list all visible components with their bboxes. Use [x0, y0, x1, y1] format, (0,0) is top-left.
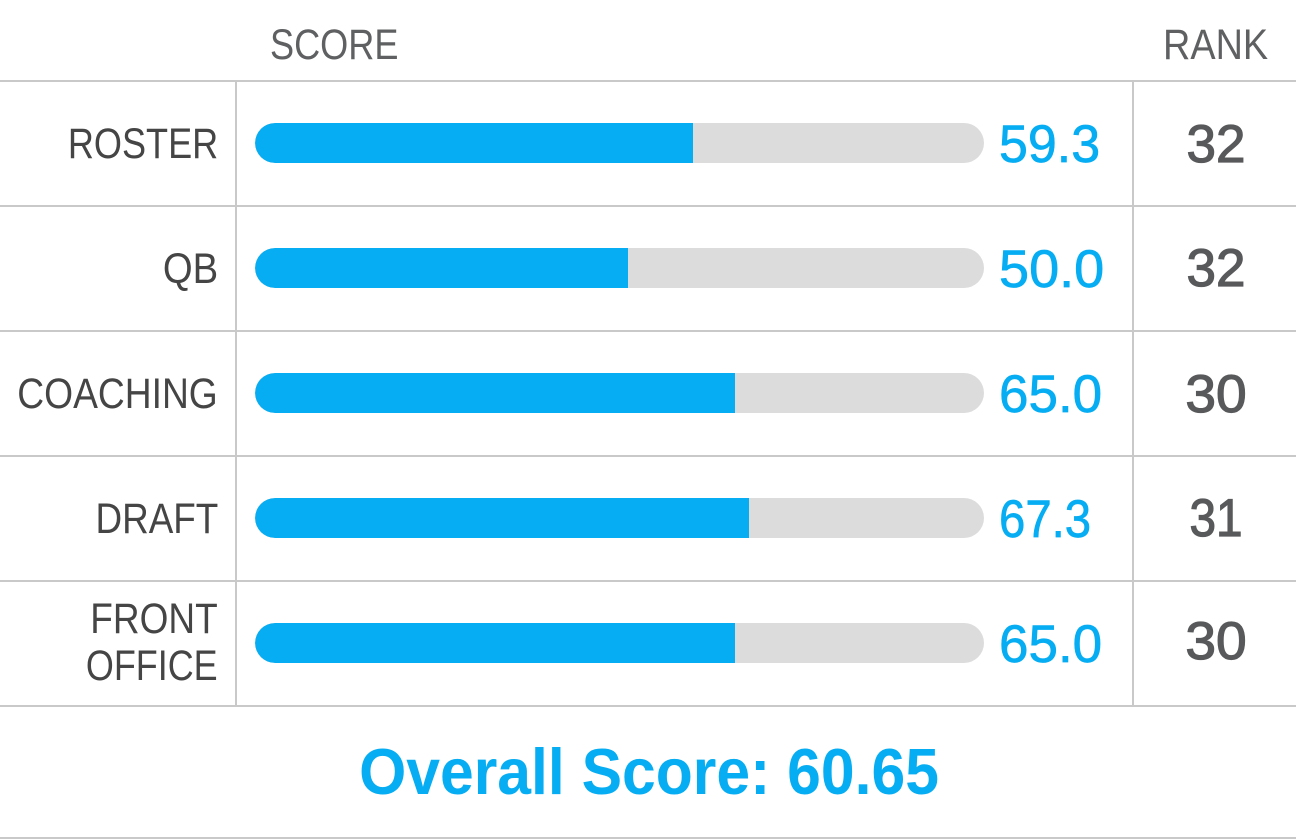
rank: roster: 32	[1187, 115, 1245, 174]
bar: coaching	[255, 373, 984, 413]
rank: qb: 32	[1187, 239, 1245, 298]
rank: draft: 31	[1189, 489, 1243, 548]
bar: front office	[255, 623, 984, 663]
bar: draft	[255, 498, 984, 538]
value: qb: 50.0	[999, 240, 1104, 299]
label: front office: FRONT	[91, 595, 218, 643]
value: front office: 65.0	[999, 615, 1102, 674]
bar: roster	[255, 123, 984, 163]
heading: rank: RANK	[1163, 21, 1268, 69]
label: front office: OFFICE	[86, 642, 218, 690]
label: coaching: COACHING	[18, 370, 218, 418]
value: roster: 59.3	[999, 115, 1100, 174]
overall score: Overall Score: 60.65	[359, 735, 939, 808]
heading: score: SCORE	[270, 21, 398, 69]
label: draft: DRAFT	[95, 495, 218, 543]
value: coaching: 65.0	[999, 365, 1102, 424]
rank: front office: 30	[1185, 612, 1247, 671]
rank: coaching: 30	[1185, 365, 1247, 424]
label: roster: ROSTER	[68, 120, 218, 168]
label: qb: QB	[163, 245, 218, 293]
bar: qb	[255, 248, 984, 288]
value: draft: 67.3	[999, 490, 1091, 549]
label: front office	[86, 595, 218, 690]
